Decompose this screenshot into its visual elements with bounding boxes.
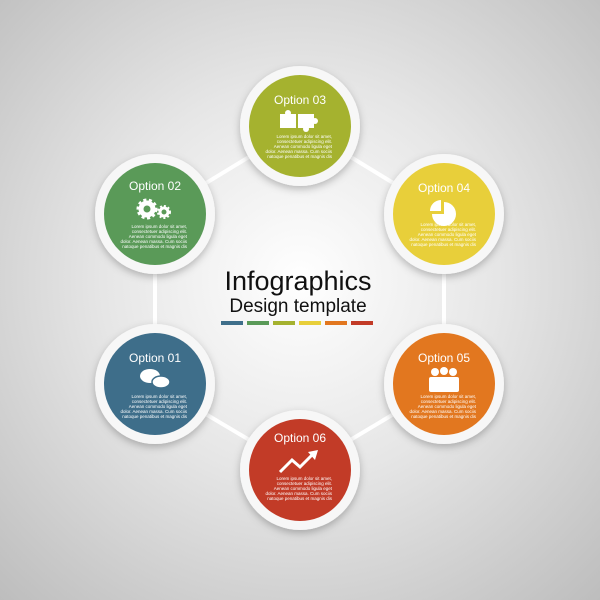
option 01: Option 01	[129, 351, 181, 365]
option 04: Lorem ipsum dolor sit amet,	[420, 222, 476, 227]
icon: chart	[280, 455, 312, 472]
option 01: dolor. Aenean massa. Cum sociis	[120, 409, 188, 414]
option 05: natoque penatibus et magnis dis	[411, 414, 477, 419]
option 02: Option 02	[129, 179, 181, 193]
option 05: Lorem ipsum dolor sit amet,	[420, 394, 476, 399]
option 03: Option 03	[274, 93, 326, 107]
option 03: consectetuer adipiscing elit.	[277, 139, 332, 144]
option 06: Option 06	[274, 431, 326, 445]
option 05: dolor. Aenean massa. Cum sociis	[409, 409, 477, 414]
option 02: Aenean commodo ligula eget	[129, 234, 188, 239]
icon: chat bubbles	[140, 369, 170, 388]
option 02: Lorem ipsum dolor sit amet,	[131, 224, 187, 229]
option 06: Lorem ipsum dolor sit amet,	[276, 476, 332, 481]
option 04	[384, 154, 504, 274]
option 05	[384, 324, 504, 444]
option 02: consectetuer adipiscing elit.	[132, 229, 187, 234]
option 06: natoque penatibus et magnis dis	[267, 496, 333, 501]
option 06	[240, 410, 360, 530]
option 03	[240, 66, 360, 186]
option 02	[95, 154, 215, 274]
option 01: Aenean commodo ligula eget	[129, 404, 188, 409]
option 02: natoque penatibus et magnis dis	[122, 244, 188, 249]
title	[224, 266, 372, 317]
option 01: Lorem ipsum dolor sit amet,	[131, 394, 187, 399]
option 04: consectetuer adipiscing elit.	[421, 227, 476, 232]
option 05: Aenean commodo ligula eget	[418, 404, 477, 409]
icon: pie	[430, 200, 456, 226]
option 04: natoque penatibus et magnis dis	[411, 242, 477, 247]
option 03: natoque penatibus et magnis dis	[267, 154, 333, 159]
option 06: dolor. Aenean massa. Cum sociis	[265, 491, 333, 496]
title: Design template	[229, 296, 367, 317]
option 05: consectetuer adipiscing elit.	[421, 399, 476, 404]
color bars	[221, 321, 373, 325]
option 04: Aenean commodo ligula eget	[418, 232, 477, 237]
option 06: consectetuer adipiscing elit.	[277, 481, 332, 486]
option 04: Option 04	[418, 181, 470, 195]
title: Infographics	[224, 266, 372, 296]
option 01	[95, 324, 215, 444]
icon: gears	[138, 200, 170, 218]
option 01: consectetuer adipiscing elit.	[132, 399, 187, 404]
icon: puzzle	[280, 110, 318, 132]
option 03: Aenean commodo ligula eget	[274, 144, 333, 149]
option 06: Aenean commodo ligula eget	[274, 486, 333, 491]
option 05: Option 05	[418, 351, 470, 365]
hexagon connectors	[155, 126, 444, 470]
option 04: dolor. Aenean massa. Cum sociis	[409, 237, 477, 242]
option 02: dolor. Aenean massa. Cum sociis	[120, 239, 188, 244]
option 03: Lorem ipsum dolor sit amet,	[276, 134, 332, 139]
option 03: dolor. Aenean massa. Cum sociis	[265, 149, 333, 154]
option 01: natoque penatibus et magnis dis	[122, 414, 188, 419]
icon: people	[429, 367, 459, 392]
